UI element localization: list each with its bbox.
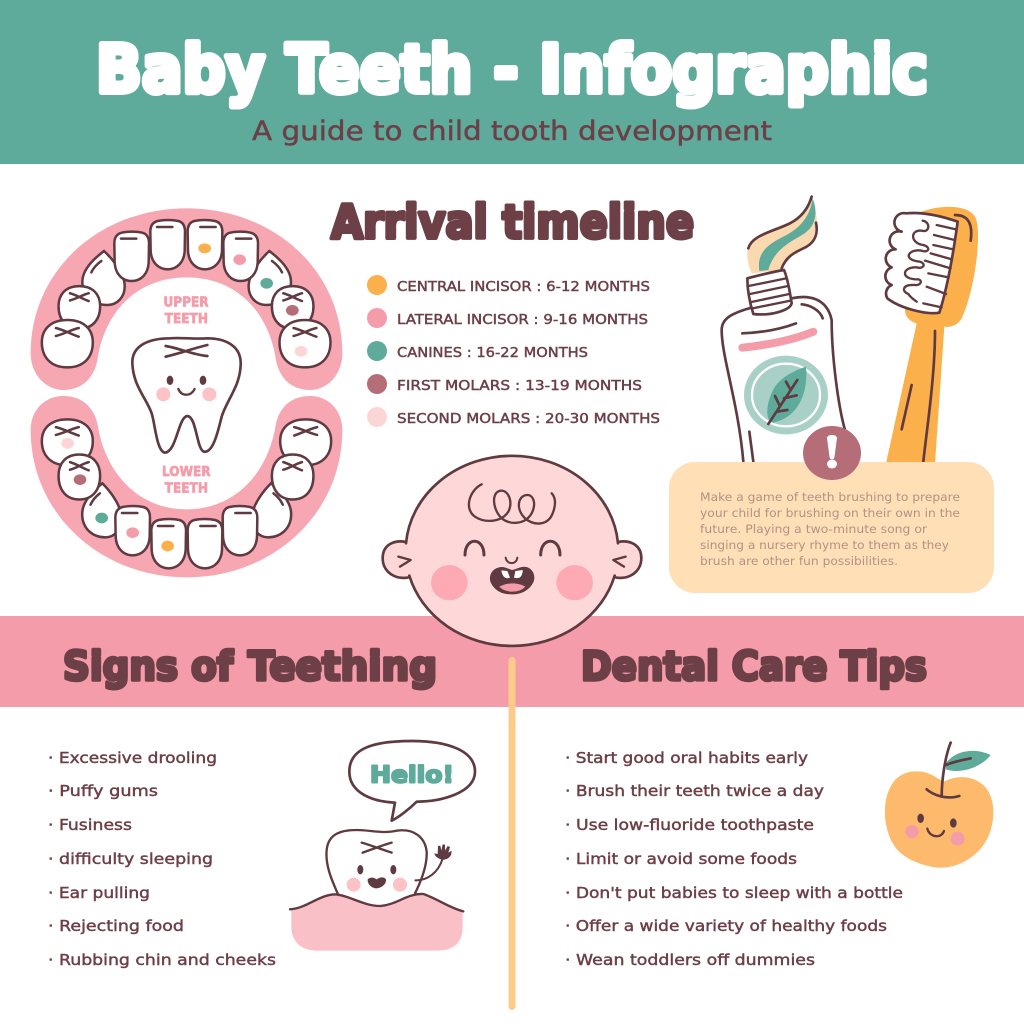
mouth [490,567,534,594]
legend text: central incisor: CENTRAL INCISOR : 6-12 MONTHS [397,279,650,295]
apple body [885,771,993,868]
label: lower teeth: LOWER [162,465,211,480]
left ear [383,541,414,578]
list: dental care tips: · Use low-fluoride toothpaste [565,816,814,834]
list: signs of teething [48,749,276,969]
list: signs of teething: · difficulty sleeping [48,850,213,868]
head [406,456,618,646]
legend dot: central incisor [367,275,387,295]
label: lower teeth [162,465,211,497]
upper gum [31,208,342,390]
list: signs of teething: · Ear pulling [48,884,150,902]
legend dot: first molars [367,374,387,394]
dot: lateral incisor lower [126,527,139,538]
upper teeth [42,220,330,367]
list: dental care tips: · Brush their teeth twice a day [565,782,824,800]
dot: first molar lower [74,474,86,485]
dot: first molar [286,305,299,316]
lower teeth [42,419,331,568]
list: dental care tips: · Don't put babies to sleep with a bottle [565,884,903,902]
hello text: Hello! [370,761,454,789]
toothbrush [885,207,978,463]
callout text: future. Playing a two-minute song or [700,522,927,536]
stem [927,743,971,797]
dot: second molar lower [61,438,74,449]
legend text: first molars: FIRST MOLARS : 13-19 MONTHS [397,378,642,394]
illustration: waving tooth with speech bubble [290,741,475,951]
heading: signs of teething [63,644,437,690]
list: dental care tips: · Limit or avoid some foods [565,850,797,868]
dot: canine lower [95,513,108,523]
callout: brushing tip [669,462,994,593]
dot: lateral incisor [233,254,246,265]
list: signs of teething: · Rejecting food [48,917,184,935]
label: lower teeth: TEETH [165,482,208,497]
gum line [290,894,463,911]
waving arm [415,858,443,880]
legend text: second molars: SECOND MOLARS : 20-30 MONTHS [397,411,660,427]
list: dental care tips: · Offer a wide variety of healthy foods [565,917,887,935]
list: signs of teething: · Puffy gums [48,782,158,800]
subtitle: A guide to child tooth development [252,116,772,147]
dot: canine [260,278,273,289]
leaf [946,751,991,771]
heading: dental care tips: Dental Care Tips [581,644,927,690]
heading: signs of teething: Teething [248,644,437,690]
eyes [465,541,560,555]
legend text: lateral incisor: LATERAL INCISOR : 9-16 MONTHS [397,312,648,328]
list: dental care tips [565,749,903,969]
list: signs of teething: · Rubbing chin and cheeks [48,951,276,969]
legend: arrival timeline [367,275,660,427]
toothpaste tube [722,197,845,462]
chart: teeth arrival map [31,208,342,577]
illustration: baby face [383,456,641,646]
legend dot: lateral incisor [367,308,387,328]
heading: signs of teething: Signs of [63,644,234,690]
dot: central incisor lower [161,541,174,551]
list: signs of teething: · Fusiness [48,816,132,834]
illustration: smiling apple [885,743,993,868]
label: upper teeth: TEETH [165,312,208,327]
illustration: toothpaste and toothbrush [722,197,978,463]
label: upper teeth: UPPER [163,295,209,310]
right ear [610,541,641,578]
callout text [700,490,960,568]
waving hand [434,844,452,860]
callout text: singing a nursery rhyme to them as they [700,538,949,552]
lower gum [31,396,342,577]
dot: central incisor [198,243,211,253]
hair curl [469,484,555,524]
header band [0,0,1024,164]
list: dental care tips: · Start good oral habits early [565,749,808,767]
callout text: Make a game of teeth brushing to prepare [700,490,960,504]
vertical divider [508,657,516,1010]
icon: exclamation badge [803,426,861,480]
ear details [398,557,626,567]
legend dot: second molars [367,407,387,427]
legend text: canines: CANINES : 16-22 MONTHS [397,345,588,361]
gum [291,895,463,951]
nose [506,558,517,563]
list: signs of teething: · Excessive drooling [48,749,217,767]
label: upper teeth [163,295,209,327]
callout text: your child for brushing on their own in the [700,506,960,520]
apple face [917,814,924,823]
heading: arrival timeline: Arrival timeline [331,195,694,249]
dot: second molar [295,346,307,357]
legend dot: canines [367,341,387,361]
pink section band [0,616,1024,707]
callout text: brush are other fun possibilities. [700,554,898,568]
speech bubble [349,741,475,821]
smiling tooth mascot [132,338,241,453]
title: Baby Teeth - Infographic [96,31,928,108]
list: dental care tips: · Wean toddlers off dummies [565,951,815,969]
cheeks [431,565,468,600]
tooth [326,830,427,906]
